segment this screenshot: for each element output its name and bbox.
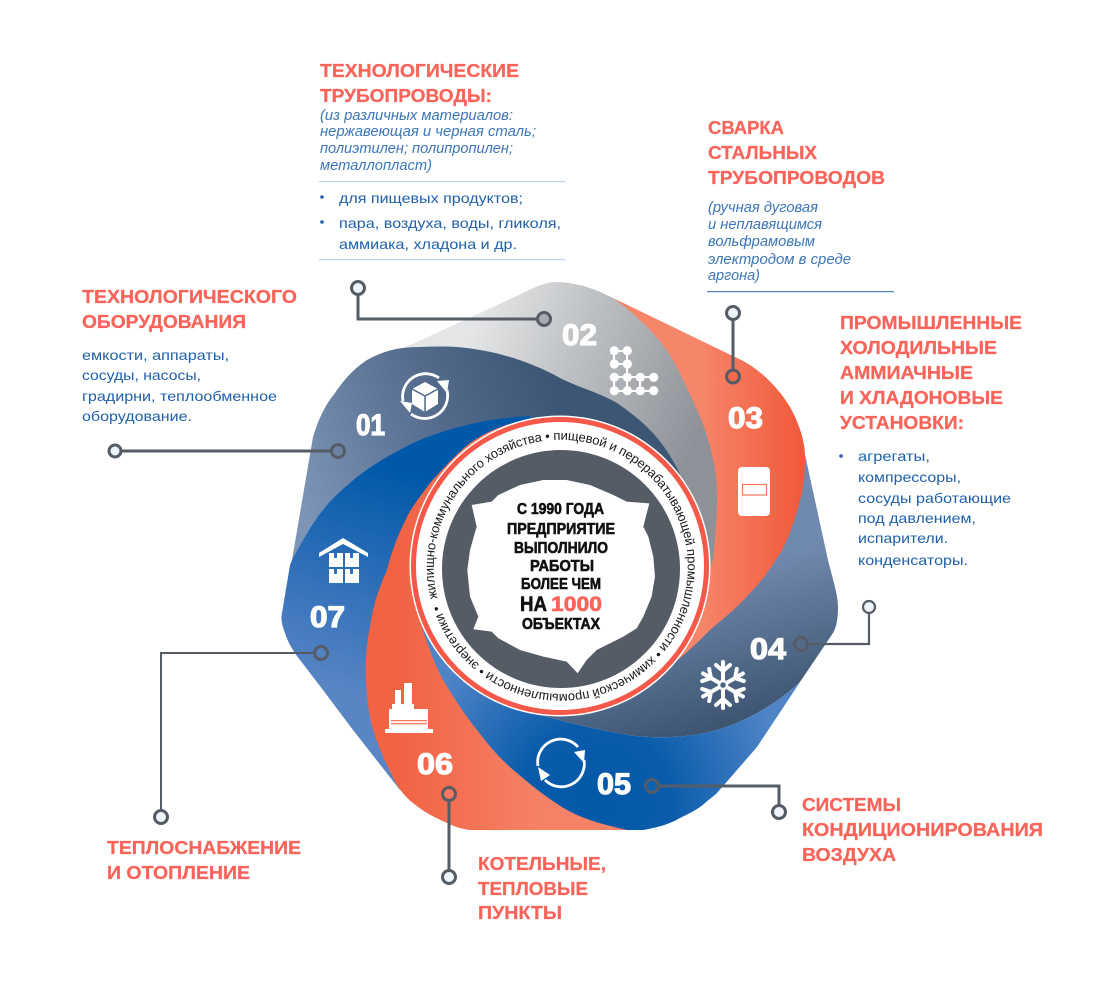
segment numbers: 04 bbox=[750, 633, 786, 666]
centre statement: ПРЕДПРИЯТИЕ bbox=[507, 521, 615, 538]
text block 02: process pipelines: аммиака, хладона и др. bbox=[339, 236, 517, 252]
text block 01: technological equipment: ТЕХНОЛОГИЧЕСКОГО bbox=[82, 287, 297, 307]
petal 05 bbox=[417, 560, 800, 830]
icon: house with boxes (07) bbox=[319, 538, 368, 583]
text block 02: process pipelines: ТРУБОПРОВОДЫ: bbox=[320, 86, 492, 106]
text block 04: refrigeration units: ХОЛОДИЛЬНЫЕ bbox=[840, 338, 997, 358]
centre statement: БОЛЕЕ ЧЕМ bbox=[521, 576, 601, 593]
icon: box with cycle arrows (01) bbox=[400, 374, 449, 419]
text block 05: air conditioning: КОНДИЦИОНИРОВАНИЯ bbox=[802, 820, 1043, 840]
text block 03: steel pipe welding: и неплавящимся bbox=[708, 217, 822, 233]
petal 03 bbox=[600, 298, 805, 672]
text block 02: process pipelines: для пищевых продуктов; bbox=[339, 190, 523, 206]
centre statement: С 1990 ГОДА bbox=[517, 501, 604, 518]
text block 02: process pipelines: полиэтилен; полипропилен; bbox=[320, 141, 513, 157]
text block 04: refrigeration units: испарители. bbox=[858, 530, 948, 546]
text block 01: technological equipment: сосуды, насосы, bbox=[82, 367, 201, 383]
icon: cycle arrows (05) bbox=[538, 739, 585, 787]
text block 02: process pipelines: нержавеющая и черная сталь; bbox=[320, 124, 536, 140]
centre statement: ОБЪЕКТАХ bbox=[522, 616, 601, 633]
text block 07: heating bbox=[107, 838, 301, 883]
text block 01: technological equipment: оборудование. bbox=[82, 408, 192, 424]
text block 04: refrigeration units: агрегаты, bbox=[858, 448, 930, 464]
petal 06 bbox=[366, 423, 640, 830]
text block 03: steel pipe welding: СТАЛЬНЫХ bbox=[708, 143, 817, 163]
centre statement: ВЫПОЛНИЛО bbox=[514, 540, 608, 557]
text block 04: refrigeration units: УСТАНОВКИ: bbox=[840, 413, 964, 433]
text block 03: steel pipe welding: (ручная дуговая bbox=[708, 200, 818, 216]
text block 06: boiler houses: КОТЕЛЬНЫЕ, bbox=[478, 854, 606, 874]
segment numbers: 07 bbox=[310, 601, 345, 634]
text block 06: boiler houses: ТЕПЛОВЫЕ bbox=[478, 879, 588, 899]
text block 04: refrigeration units bbox=[839, 313, 1022, 568]
text block 04: refrigeration units: ПРОМЫШЛЕННЫЕ bbox=[840, 313, 1022, 333]
connector 05 bbox=[646, 780, 786, 818]
segment numbers: 03 bbox=[728, 402, 763, 435]
segment numbers bbox=[310, 319, 786, 801]
text block 04: refrigeration units: АММИАЧНЫЕ bbox=[840, 363, 973, 383]
connector 02 bbox=[352, 282, 550, 326]
segment numbers: 01 bbox=[356, 409, 385, 442]
text block 04: refrigeration units: под давлением, bbox=[858, 510, 976, 526]
connector 07 bbox=[154, 646, 328, 824]
centre statement: НА bbox=[520, 593, 547, 616]
petals: seven-segment swirl bbox=[281, 282, 838, 830]
text block 04: refrigeration units: конденсаторы. bbox=[858, 552, 968, 568]
petal 02 bbox=[395, 282, 717, 580]
text block 01: technological equipment: ОБОРУДОВАНИЯ bbox=[82, 312, 246, 332]
text block 02: process pipelines: (из различных материалов: bbox=[320, 108, 513, 124]
text block 04: refrigeration units: компрессоры, bbox=[858, 469, 961, 485]
text block 03: steel pipe welding: ТРУБОПРОВОДОВ bbox=[708, 168, 885, 188]
text block 02: process pipelines: металлопласт) bbox=[320, 158, 432, 174]
text block 07: heating: И ОТОПЛЕНИЕ bbox=[107, 863, 250, 883]
text block 02: process pipelines bbox=[319, 61, 565, 260]
white shield bbox=[467, 480, 655, 673]
segment numbers: 06 bbox=[417, 748, 453, 781]
text block 03: steel pipe welding: СВАРКА bbox=[708, 118, 784, 138]
centre statement bbox=[507, 501, 615, 633]
icon: appliance panel (03) bbox=[738, 467, 770, 516]
text block 03: steel pipe welding: аргона) bbox=[708, 268, 760, 284]
text block 01: technological equipment bbox=[82, 287, 297, 424]
icon: molecule lattice (02) bbox=[611, 347, 657, 394]
connector 03 bbox=[726, 306, 740, 383]
segment numbers: 02 bbox=[562, 319, 597, 352]
text block 03: steel pipe welding: электродом в среде bbox=[708, 252, 851, 268]
text block 01: technological equipment: емкости, аппараты, bbox=[82, 347, 229, 363]
text block 02: process pipelines: ТЕХНОЛОГИЧЕСКИЕ bbox=[320, 61, 519, 81]
text block 01: technological equipment: градирни, теплообменное bbox=[82, 388, 277, 404]
segment numbers: 05 bbox=[597, 768, 631, 801]
connector 04 bbox=[794, 601, 875, 650]
text block 05: air conditioning bbox=[802, 795, 1043, 865]
central badge bbox=[410, 416, 710, 716]
text block 05: air conditioning: ВОЗДУХА bbox=[802, 845, 896, 865]
text block 06: boiler houses bbox=[478, 854, 606, 923]
text block 04: refrigeration units: И ХЛАДОНОВЫЕ bbox=[840, 388, 1003, 408]
petal 07 bbox=[281, 416, 560, 790]
petal 01 bbox=[292, 346, 695, 560]
connector 06 bbox=[442, 788, 456, 884]
text block 03: steel pipe welding bbox=[707, 118, 894, 292]
text block 03: steel pipe welding: вольфрамовым bbox=[708, 234, 815, 250]
connector 01 bbox=[109, 444, 344, 458]
icon: snowflake (04) bbox=[700, 662, 746, 708]
text block 04: refrigeration units: сосуды работающие bbox=[858, 490, 1011, 506]
text block 05: air conditioning: СИСТЕМЫ bbox=[802, 795, 901, 815]
centre statement: 1000 bbox=[551, 593, 602, 616]
icon: factory (06) bbox=[385, 683, 433, 733]
centre statement: РАБОТЫ bbox=[530, 558, 594, 575]
circular industries text: жилищно-коммунального хозяйства • пищевой и перерабатывающей промышленности • химической промышленности • энергетики • bbox=[426, 432, 696, 701]
text block 07: heating: ТЕПЛОСНАБЖЕНИЕ bbox=[107, 838, 301, 858]
text block 02: process pipelines: пара, воздуха, воды, гликоля, bbox=[339, 215, 561, 231]
petal 04 bbox=[530, 450, 838, 737]
grey ring bbox=[442, 450, 680, 688]
text block 06: boiler houses: ПУНКТЫ bbox=[478, 903, 562, 923]
